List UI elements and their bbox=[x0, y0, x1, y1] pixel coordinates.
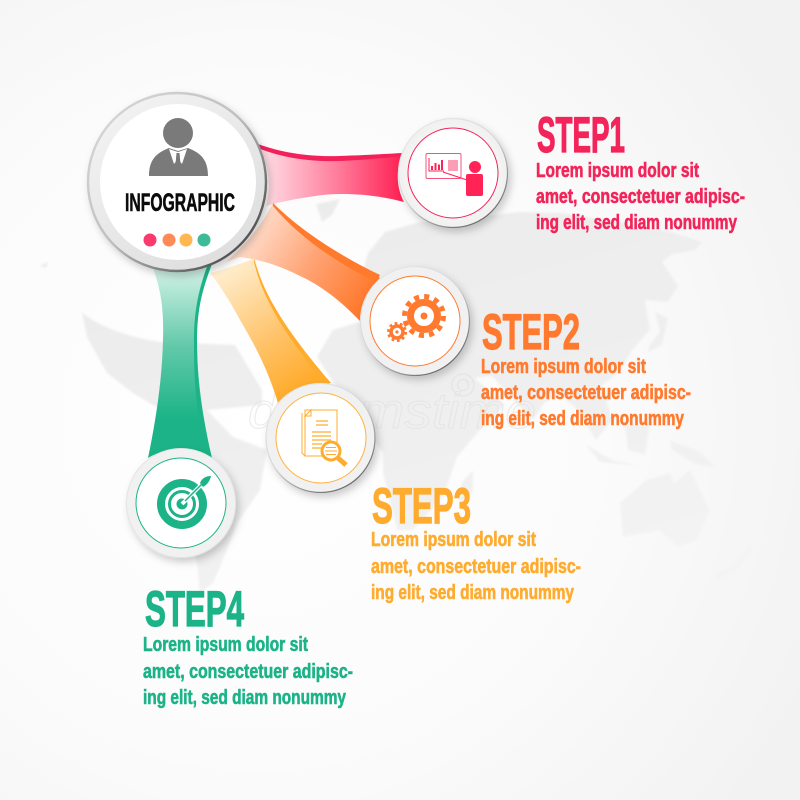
text: step 2 bbox=[481, 304, 691, 430]
icon: document and magnifier bbox=[302, 410, 346, 465]
icon: gears bbox=[388, 296, 444, 340]
text: step 3: STEP3 bbox=[372, 478, 471, 534]
icon: presenter at chart bbox=[426, 154, 483, 196]
ribbon: step 4 bbox=[148, 264, 212, 458]
text: step 3: amet, consectetuer adipisc- bbox=[371, 556, 581, 578]
text: step 1: ing elit, sed diam nonummy bbox=[536, 212, 738, 234]
text: step 4: STEP4 bbox=[145, 581, 244, 637]
text: step 2: STEP2 bbox=[482, 304, 580, 360]
ribbon: step 3 bbox=[210, 258, 331, 403]
text: step 1: Lorem ipsum dolor sit bbox=[536, 160, 699, 182]
icon: person bbox=[149, 118, 208, 176]
text: step 4: ing elit, sed diam nonummy bbox=[143, 687, 347, 709]
main title: INFOGRAPHIC bbox=[125, 189, 235, 217]
ribbon: step 1 bbox=[258, 144, 404, 206]
circle: step 2 bbox=[360, 266, 470, 376]
text: step 2: amet, consectetuer adipisc- bbox=[481, 382, 691, 404]
watermark: dreamstime bbox=[248, 383, 536, 439]
text: step 3 bbox=[371, 478, 581, 604]
text: step 4 bbox=[143, 581, 353, 709]
text: step 1: STEP1 bbox=[537, 107, 625, 163]
text: step 1: amet, consectetuer adipisc- bbox=[536, 186, 745, 208]
text: step 2: Lorem ipsum dolor sit bbox=[481, 356, 646, 378]
text: step 2: ing elit, sed diam nonummy bbox=[481, 408, 685, 430]
ribbon: step 2 bbox=[226, 203, 380, 322]
text: step 1 bbox=[536, 107, 745, 234]
colour dots bbox=[144, 234, 210, 246]
text: step 3: Lorem ipsum dolor sit bbox=[371, 529, 536, 551]
circle: step 3 bbox=[266, 384, 375, 492]
circle: step 4 bbox=[126, 448, 236, 558]
icon: target bbox=[161, 476, 211, 525]
world map bbox=[40, 199, 752, 593]
text: step 4: amet, consectetuer adipisc- bbox=[143, 661, 353, 683]
circle: step 1 bbox=[398, 118, 508, 228]
text: step 4: Lorem ipsum dolor sit bbox=[143, 634, 308, 656]
text: step 3: ing elit, sed diam nonummy bbox=[371, 582, 575, 604]
main circle bbox=[88, 93, 266, 271]
